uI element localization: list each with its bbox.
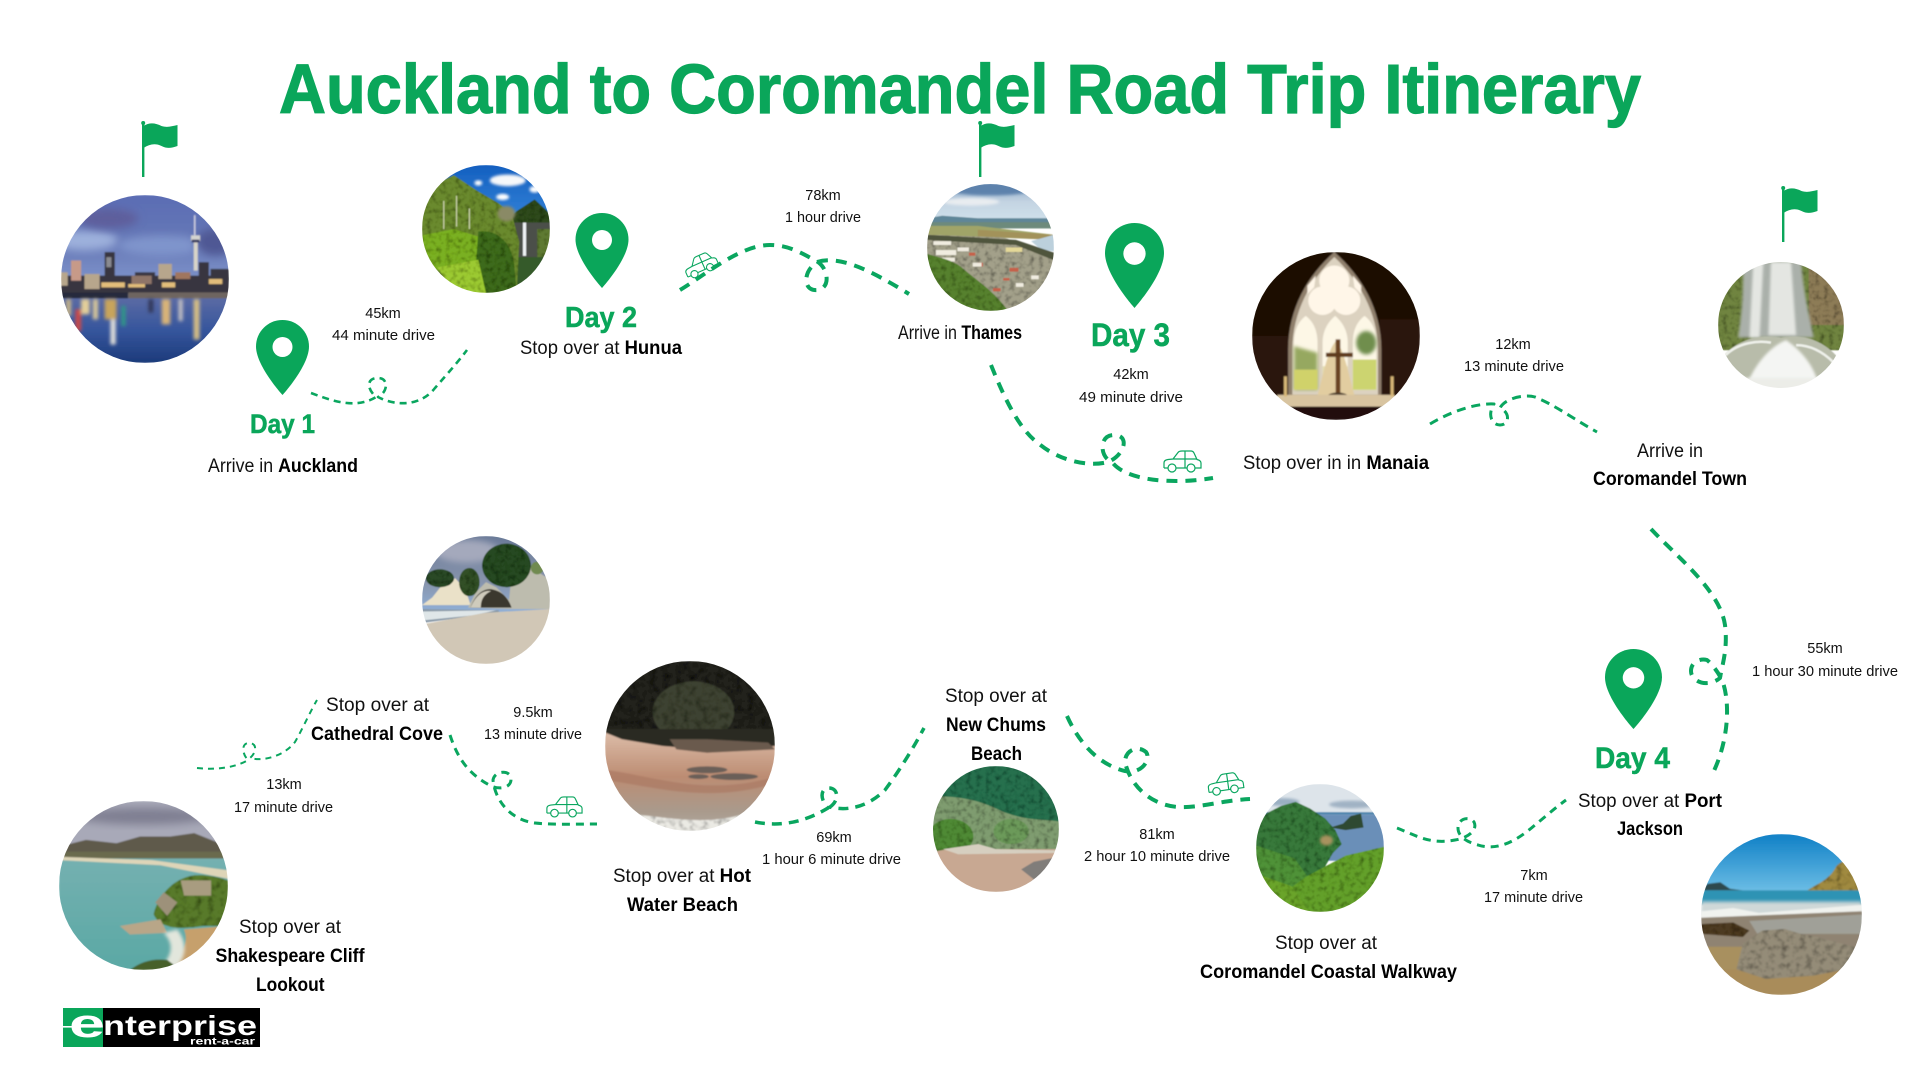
distance: 42km: 49 minute drive bbox=[1079, 390, 1183, 406]
caption: Shakespeare Cliff Lookout: Stop over at bbox=[239, 917, 342, 938]
caption: Hot Water Beach: Water Beach bbox=[627, 895, 738, 916]
distance: 78km: 78km bbox=[805, 188, 841, 204]
route: Manaia to Coromandel Town bbox=[1430, 396, 1597, 432]
distance: 45km: 45km bbox=[365, 306, 401, 322]
distance: 81km: 2 hour 10 minute drive bbox=[1084, 849, 1230, 865]
caption: Cathedral Cove bbox=[311, 695, 443, 745]
photo: Coromandel Coastal Walkway bbox=[1256, 784, 1384, 912]
photo: Auckland skyline bbox=[61, 195, 229, 363]
icon: car on route to Coastal Walkway bbox=[1207, 772, 1244, 796]
map pin: Day 3 bbox=[1105, 223, 1164, 308]
distance: 78km: 1 hour drive bbox=[785, 210, 861, 226]
distance: 69km: 69km bbox=[816, 830, 852, 846]
distance: 9.5km: 9.5km bbox=[513, 705, 553, 721]
caption: Shakespeare Cliff Lookout: Shakespeare Cliff bbox=[216, 946, 365, 967]
route: New Chums to Coastal Walkway bbox=[1067, 716, 1250, 807]
icon: car on route to Hot Water Beach bbox=[547, 797, 582, 817]
distance: 69km bbox=[762, 830, 901, 868]
distance: 13km bbox=[234, 777, 333, 816]
distance: 42km bbox=[1079, 367, 1183, 406]
caption: Cathedral Cove: Stop over at bbox=[326, 695, 430, 716]
distance: 81km: 81km bbox=[1139, 827, 1175, 843]
logo: enterprise rent-a-car: nterprise bbox=[103, 1010, 257, 1041]
distance: 55km: 55km bbox=[1807, 641, 1843, 657]
flag: Thames bbox=[978, 121, 1014, 177]
map pin: Day 1 bbox=[256, 320, 309, 395]
caption: New Chums Beach bbox=[945, 686, 1048, 765]
distance: 7km bbox=[1484, 868, 1583, 906]
route: Coromandel Town to Port Jackson bbox=[1651, 529, 1727, 777]
caption: Auckland: Arrive in Auckland bbox=[208, 456, 358, 477]
caption: Coromandel Town bbox=[1593, 441, 1747, 490]
caption: Coromandel Town: Arrive in bbox=[1637, 441, 1703, 462]
distance: 45km bbox=[332, 306, 435, 344]
photo: Coromandel waterfall bbox=[1718, 262, 1844, 388]
caption: New Chums Beach: Beach bbox=[971, 744, 1022, 765]
route: Auckland to Hunua bbox=[311, 350, 467, 403]
heading: Day 2: Day 2 bbox=[565, 302, 637, 334]
distance: 12km: 12km bbox=[1495, 337, 1531, 353]
caption: Coromandel Coastal Walkway: Stop over at bbox=[1275, 933, 1378, 954]
heading: Day 4: Day 4 bbox=[1595, 742, 1670, 775]
route: Hunua to Thames bbox=[680, 245, 909, 294]
caption: Manaia: Stop over in in Manaia bbox=[1243, 453, 1429, 474]
distance: 9.5km bbox=[484, 705, 582, 743]
photo: Manaia church window bbox=[1252, 252, 1420, 420]
photo: Port Jackson beach bbox=[1701, 834, 1862, 995]
route: Cathedral Cove to Hot Water Beach bbox=[450, 735, 597, 824]
caption: Port Jackson: Jackson bbox=[1617, 819, 1683, 840]
distance: 7km: 17 minute drive bbox=[1484, 890, 1583, 906]
photo: Hunua falls bbox=[422, 165, 550, 293]
photo: Shakespeare Cliff Lookout bbox=[59, 801, 228, 970]
distance: 13km: 13km bbox=[266, 777, 302, 793]
caption: Port Jackson: Stop over at Port bbox=[1578, 791, 1723, 812]
route: Coastal Walkway to Port Jackson bbox=[1397, 800, 1566, 847]
distance: 12km bbox=[1464, 337, 1564, 375]
distance: 13km: 17 minute drive bbox=[234, 800, 333, 816]
route: Hot Water Beach to New Chums bbox=[755, 728, 924, 824]
caption: Shakespeare Cliff Lookout: Lookout bbox=[256, 975, 325, 996]
caption: Thames: Arrive in Thames bbox=[898, 323, 1022, 344]
caption: Coromandel Coastal Walkway bbox=[1200, 933, 1457, 983]
distance: 9.5km: 13 minute drive bbox=[484, 727, 582, 743]
caption: Coromandel Town: Coromandel Town bbox=[1593, 469, 1747, 490]
distance: 12km: 13 minute drive bbox=[1464, 359, 1564, 375]
photo: Cathedral Cove bbox=[422, 536, 550, 664]
distance: 69km: 1 hour 6 minute drive bbox=[762, 852, 901, 868]
distance: 81km bbox=[1084, 827, 1230, 865]
distance: 45km: 44 minute drive bbox=[332, 328, 435, 344]
caption: Cathedral Cove: Cathedral Cove bbox=[311, 724, 443, 745]
flag: Day 1 start bbox=[141, 121, 178, 177]
title: Auckland to Coromandel Road Trip Itinerary bbox=[279, 50, 1641, 128]
logo: enterprise rent-a-car: e bbox=[69, 1002, 105, 1046]
icon: car on route to Manaia bbox=[1164, 451, 1201, 472]
logo: enterprise rent-a-car bbox=[63, 1002, 260, 1048]
caption: Coromandel Coastal Walkway: Coromandel Coastal Walkway bbox=[1200, 962, 1457, 983]
caption: Hunua: Stop over at Hunua bbox=[520, 338, 682, 359]
map pin: Day 2 bbox=[576, 213, 628, 288]
caption: Hot Water Beach: Stop over at Hot bbox=[613, 866, 752, 887]
heading: Day 3: Day 3 bbox=[1091, 317, 1170, 353]
photo: Hot Water Beach bbox=[605, 661, 775, 831]
caption: New Chums Beach: Stop over at bbox=[945, 686, 1048, 707]
route: Thames to Manaia bbox=[991, 365, 1213, 481]
distance: 55km: 1 hour 30 minute drive bbox=[1752, 664, 1898, 680]
icon: car on route to Thames bbox=[682, 250, 720, 280]
distance: 55km bbox=[1752, 641, 1898, 680]
logo: enterprise rent-a-car: rent-a-car bbox=[190, 1036, 255, 1048]
distance: 42km: 42km bbox=[1113, 367, 1149, 383]
caption: Port Jackson bbox=[1578, 791, 1723, 840]
photo: Thames town bbox=[927, 184, 1054, 311]
photo: New Chums Beach bbox=[933, 766, 1059, 892]
caption: Shakespeare Cliff Lookout bbox=[216, 917, 365, 996]
caption: Hot Water Beach bbox=[613, 866, 752, 916]
caption: New Chums Beach: New Chums bbox=[946, 715, 1046, 736]
flag: Coromandel Town bbox=[1781, 186, 1818, 242]
distance: 78km bbox=[785, 188, 861, 226]
heading: Day 1: Day 1 bbox=[250, 409, 315, 439]
distance: 7km: 7km bbox=[1520, 868, 1548, 884]
map pin: Day 4 bbox=[1605, 649, 1662, 729]
route: Shakespeare Cliff to Cathedral Cove bbox=[197, 700, 317, 769]
